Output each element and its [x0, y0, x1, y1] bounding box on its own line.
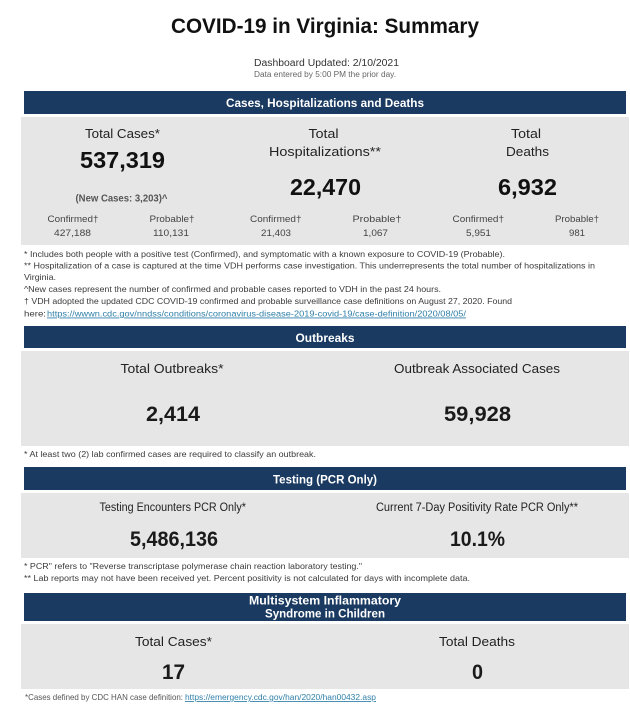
positivity rate stat: 10.1%	[450, 528, 505, 551]
cases breakdown: 427,188	[54, 228, 91, 239]
footnote: outbreaks: * At least two (2) lab confirmed cases are required to classify an outbreak.	[24, 449, 316, 459]
footnotes: cases, hospitalizations and deaths: Virginia.	[24, 272, 56, 282]
footnotes: cases, hospitalizations and deaths: ** Hospitalization of a case is captured at the time VDH performs case investigation. This underrepresents the total number of hospitalizations in	[24, 260, 595, 270]
cases breakdown	[48, 214, 194, 239]
total cases stat	[76, 126, 168, 204]
total deaths stat: 6,932	[498, 174, 557, 200]
outbreak associated cases stat: 59,928	[444, 403, 511, 426]
footnote: case definition	[25, 692, 376, 702]
title: COVID-19 in Virginia: Summary	[171, 15, 479, 38]
deaths breakdown: 981	[569, 228, 585, 239]
footnotes: testing: ** Lab reports may not have been received yet. Percent positivity is not calculated for days with incomplete data.	[24, 573, 470, 583]
outbreak associated cases stat: Outbreak Associated Cases	[394, 361, 561, 376]
footnotes: cases, hospitalizations and deaths: * Includes both people with a positive test (Confirmed), and symptomatic with a known exposure to COVID-19 (Probable).	[24, 249, 505, 259]
section header: multisystem inflammatory syndrome in children	[24, 593, 626, 621]
total deaths stat: 0	[472, 661, 483, 684]
total hospitalizations stat	[269, 126, 381, 200]
cases breakdown: Confirmed†	[48, 214, 98, 225]
testing encounters stat: 5,486,136	[130, 528, 218, 551]
panel: outbreaks	[21, 351, 629, 446]
footnotes: testing	[24, 561, 470, 583]
cases breakdown: Probable†	[150, 214, 194, 225]
total cases stat: 17	[162, 661, 185, 684]
total deaths stat	[439, 634, 516, 684]
footnote: case definition: https://emergency.cdc.gov/han/2020/han00432.asp	[185, 692, 376, 702]
hospitalizations breakdown	[250, 214, 402, 239]
total deaths stat: Total Deaths	[439, 634, 516, 649]
total cases stat: Total Cases*	[135, 634, 212, 649]
total outbreaks stat: Total Outbreaks*	[120, 361, 224, 376]
hospitalizations breakdown: Probable†	[352, 214, 402, 225]
footnotes: cases, hospitalizations and deaths: https://wwwn.cdc.gov/nndss/conditions/coronavirus-disease-2019-covid-19/case-definition/2020/08/05/	[47, 308, 467, 318]
panel: multisystem inflammatory syndrome in children	[21, 624, 629, 689]
section header: testing: Testing (PCR Only)	[273, 472, 377, 486]
total cases stat: Total Cases*	[85, 126, 160, 141]
testing encounters stat	[100, 502, 246, 551]
positivity rate stat	[376, 502, 578, 551]
dashboard update info: Dashboard Updated: 2/10/2021	[254, 58, 399, 69]
hospitalizations breakdown: Confirmed†	[250, 214, 302, 225]
section header: cases, hospitalizations and deaths	[24, 91, 626, 114]
dashboard update info	[254, 58, 399, 79]
total hospitalizations stat: Total	[308, 126, 339, 141]
footnotes: testing: * PCR" refers to "Reverse transcriptase polymerase chain reaction laboratory testing."	[24, 561, 362, 571]
section header: outbreaks: Outbreaks	[296, 331, 355, 345]
outbreak associated cases stat	[394, 361, 561, 426]
section header: outbreaks	[24, 326, 626, 348]
deaths breakdown: 5,951	[466, 228, 491, 239]
total hospitalizations stat: Hospitalizations**	[269, 144, 381, 159]
panel: cases, hospitalizations and deaths	[21, 117, 629, 245]
footnotes: cases, hospitalizations and deaths	[24, 249, 595, 318]
section header: testing	[24, 467, 626, 490]
dashboard update info: Data entered by 5:00 PM the prior day.	[254, 70, 396, 79]
footnotes: cases, hospitalizations and deaths: † VDH adopted the updated CDC COVID-19 confirmed and probable surveillance case definitions on August 27, 2020. Found	[24, 296, 512, 306]
panel: testing	[21, 493, 629, 558]
total cases stat: (New Cases: 3,203)^	[76, 194, 168, 204]
total hospitalizations stat: 22,470	[290, 174, 361, 200]
hospitalizations breakdown: 1,067	[363, 228, 388, 239]
footnote: case definition: *Cases defined by CDC HAN case definition:	[25, 692, 183, 702]
hospitalizations breakdown: 21,403	[261, 228, 291, 239]
footnotes: cases, hospitalizations and deaths: ^New cases represent the number of confirmed and probable cases reported to VDH in the past 24 hours.	[24, 284, 441, 294]
footnotes: cases, hospitalizations and deaths: here:	[24, 308, 46, 318]
positivity rate stat: Current 7-Day Positivity Rate PCR Only**	[376, 502, 578, 514]
deaths breakdown	[452, 214, 599, 239]
total outbreaks stat	[120, 361, 224, 426]
total deaths stat: Deaths	[506, 144, 550, 159]
deaths breakdown: Probable†	[555, 214, 599, 225]
total deaths stat	[498, 126, 557, 200]
section header: multisystem inflammatory syndrome in children: Syndrome in Children	[265, 606, 385, 620]
deaths breakdown: Confirmed†	[452, 214, 504, 225]
section header: multisystem inflammatory syndrome in children: Multisystem Inflammatory	[249, 594, 401, 608]
cases breakdown: 110,131	[153, 228, 189, 239]
total outbreaks stat: 2,414	[146, 403, 200, 426]
total deaths stat: Total	[511, 126, 541, 141]
total cases stat	[135, 634, 212, 684]
total cases stat: 537,319	[80, 147, 165, 173]
testing encounters stat: Testing Encounters PCR Only*	[100, 502, 246, 514]
section header: cases, hospitalizations and deaths: Cases, Hospitalizations and Deaths	[226, 96, 424, 110]
